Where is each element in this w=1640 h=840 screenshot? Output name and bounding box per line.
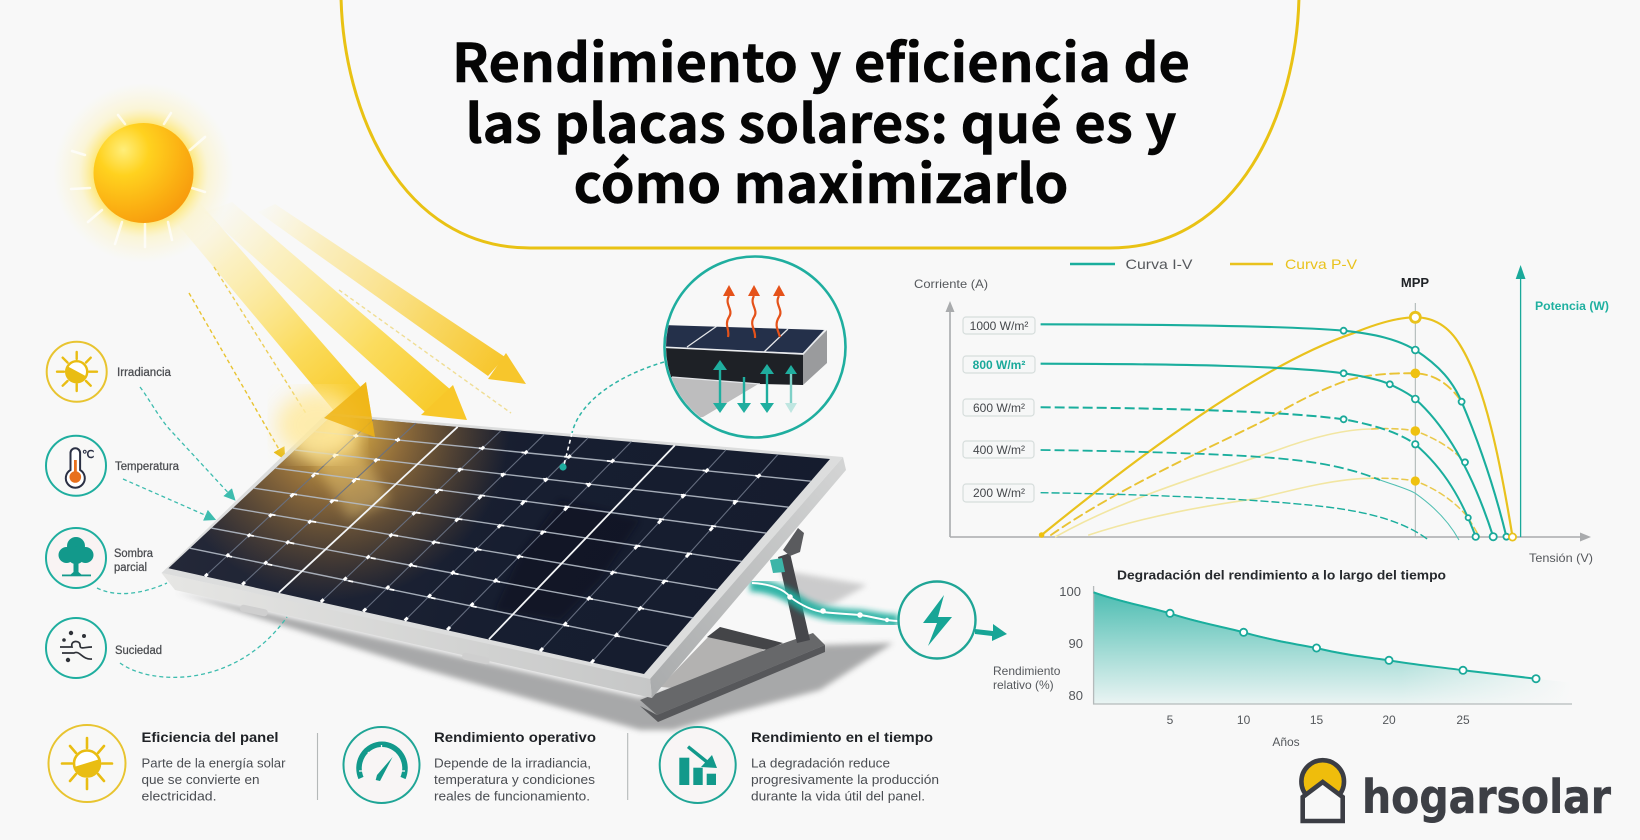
output arrow xyxy=(975,624,1007,641)
inset connector xyxy=(559,362,664,471)
text: reales de funcionamiento. xyxy=(434,788,590,804)
irradiance labels: 800 W/m² xyxy=(973,358,1025,372)
title: Rendimiento y eficiencia de xyxy=(452,22,1190,98)
panel frame xyxy=(162,413,846,698)
axis labels: 10 xyxy=(1237,713,1251,727)
icon: bars declining xyxy=(679,747,717,785)
axis labels: relativo (%) xyxy=(993,678,1054,692)
axis labels: Rendimiento xyxy=(993,664,1061,678)
panel feet xyxy=(239,604,490,665)
dividers xyxy=(318,733,628,800)
irradiance labels xyxy=(963,317,1035,502)
icon: sun xyxy=(54,83,234,263)
icon: gauge xyxy=(359,744,405,781)
chart title: Degradación del rendimiento a lo largo del tiempo xyxy=(1117,568,1446,582)
axis labels xyxy=(993,584,1470,749)
axis labels: 80 xyxy=(1069,688,1083,703)
irradiance labels: 400 W/m² xyxy=(973,443,1025,457)
title xyxy=(452,22,1190,219)
text: La degradación reduce xyxy=(751,756,890,770)
axis labels: 25 xyxy=(1456,713,1470,727)
text: Parte de la energía solar xyxy=(142,756,286,770)
axis labels xyxy=(914,275,1609,565)
text: progresivamente la producción xyxy=(751,772,939,787)
text: Rendimiento en el tiempo xyxy=(751,729,933,745)
irradiance labels: 200 W/m² xyxy=(973,486,1025,500)
irradiance labels: 1000 W/m² xyxy=(970,319,1028,333)
airflow arrows xyxy=(713,360,797,413)
legend: Curva I-V xyxy=(1126,256,1193,272)
logo wordmark: hogarsolar xyxy=(1362,770,1611,824)
factor: temperatura xyxy=(46,436,180,496)
text: que se convierte en xyxy=(142,772,260,787)
text: electricidad. xyxy=(142,788,216,804)
title panel xyxy=(341,0,1299,248)
factor: sombra parcial xyxy=(46,528,154,588)
axes xyxy=(946,265,1591,542)
icon: sun half xyxy=(62,738,112,789)
text xyxy=(751,729,939,804)
axis labels: 90 xyxy=(1069,636,1083,651)
factor: sombra parcial: Sombra xyxy=(114,548,154,560)
text: Depende de la irradiancia, xyxy=(434,756,591,770)
line xyxy=(1094,592,1536,679)
panel cells xyxy=(168,391,830,674)
summary: rendimiento en el tiempo xyxy=(660,727,939,804)
text: Rendimiento operativo xyxy=(434,729,596,745)
legend: Curva P-V xyxy=(1285,256,1358,272)
energy icon xyxy=(898,582,1007,658)
sun rays xyxy=(170,202,526,437)
panel stand xyxy=(640,528,825,722)
curve markers xyxy=(1039,312,1516,541)
title: cómo maximizarlo xyxy=(574,143,1068,219)
axis labels: Tensión (V) xyxy=(1529,551,1593,565)
axis labels: 15 xyxy=(1310,713,1323,727)
icon: bolt xyxy=(923,595,952,646)
area xyxy=(1094,592,1572,704)
title: las placas solares: qué es y xyxy=(466,83,1176,159)
text: Eficiencia del panel xyxy=(142,729,278,745)
text xyxy=(434,729,596,804)
ground shadow xyxy=(176,570,893,730)
factor: irradiancia xyxy=(47,342,172,402)
logo icon xyxy=(1301,760,1344,821)
energy cable xyxy=(750,583,898,622)
axes xyxy=(1094,586,1572,704)
text: durante la vida útil del panel. xyxy=(751,788,925,804)
solar panel xyxy=(162,382,846,698)
factor: irradiancia: Irradiancia xyxy=(117,367,172,379)
yellow dashed guide lines xyxy=(189,267,511,458)
markers xyxy=(1166,610,1540,682)
legend xyxy=(1070,256,1358,272)
icon: dirt xyxy=(60,631,92,662)
heat detail inset xyxy=(660,256,846,438)
icon: thermometer: ℃ xyxy=(82,449,94,461)
axis labels: Potencia (W) xyxy=(1535,299,1609,313)
axis labels: 20 xyxy=(1382,713,1396,727)
axis labels: Años xyxy=(1272,735,1300,749)
summary: rendimiento operativo xyxy=(344,727,596,804)
I-V P-V chart xyxy=(914,256,1609,565)
axis labels: 100 xyxy=(1059,584,1081,599)
factor: suciedad xyxy=(46,618,162,678)
degradation chart xyxy=(993,568,1572,749)
factor: suciedad: Suciedad xyxy=(115,645,162,657)
factor: temperatura: Temperatura xyxy=(115,461,180,473)
icon: tree xyxy=(58,537,94,576)
axis labels: 5 xyxy=(1167,713,1174,727)
logo xyxy=(1301,760,1611,824)
I-V curves xyxy=(1041,324,1506,540)
axis labels: Corriente (A) xyxy=(914,277,988,291)
heat arrows xyxy=(723,285,785,338)
irradiance labels: 600 W/m² xyxy=(973,401,1025,415)
P-V curves xyxy=(1042,317,1512,537)
icon: sun small xyxy=(57,352,97,391)
teal dashed connectors xyxy=(97,387,287,677)
summary: eficiencia del panel xyxy=(48,725,286,804)
text xyxy=(142,729,286,804)
axis labels: MPP xyxy=(1401,275,1429,290)
factor: sombra parcial: parcial xyxy=(114,562,147,574)
text: temperatura y condiciones xyxy=(434,772,595,787)
beam head over panel xyxy=(324,382,375,437)
